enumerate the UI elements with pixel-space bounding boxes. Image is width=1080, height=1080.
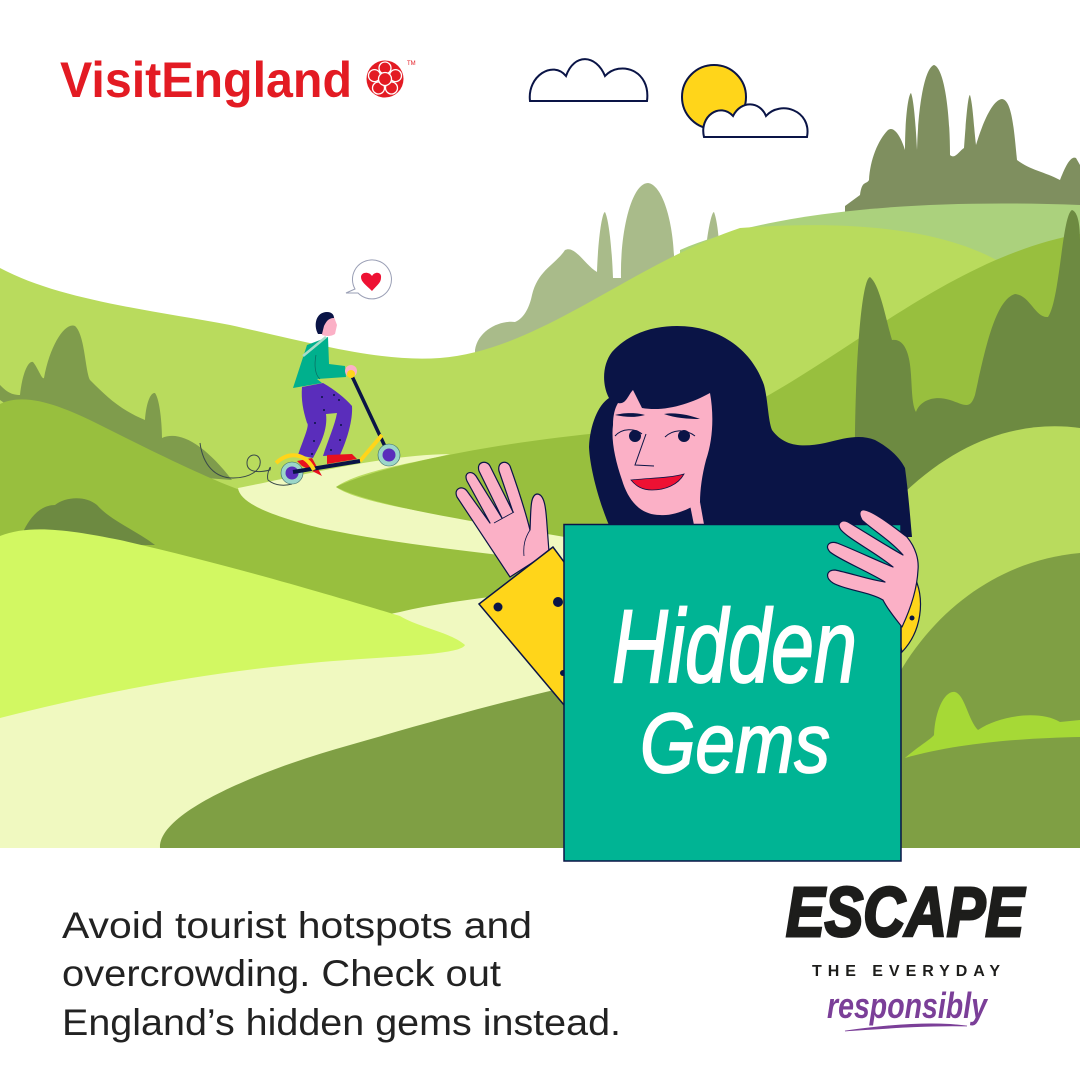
Hidden: Hidden	[612, 589, 857, 705]
hill: tongue right of road	[336, 432, 610, 545]
icon: sun	[682, 65, 746, 129]
trees: top right grey-green	[845, 65, 1080, 240]
hill: dark foreground	[160, 684, 900, 848]
fender	[276, 455, 314, 470]
front wheel	[378, 444, 400, 466]
hill: lime foreground	[0, 529, 465, 718]
waving hand	[456, 462, 549, 577]
icon: cloud left	[530, 59, 647, 101]
trousers	[298, 383, 352, 458]
ESCAPE: ESCAPE	[786, 873, 1026, 951]
grip	[347, 370, 355, 378]
shoes	[297, 454, 357, 476]
scooter rider	[200, 260, 400, 485]
logo: VisitEngland	[60, 52, 416, 108]
road: lower section	[0, 586, 580, 848]
scooter stem	[351, 374, 389, 455]
hill: right mid green	[600, 234, 1080, 848]
line 3: England’s hidden gems instead.	[62, 1002, 621, 1043]
trees: right dark	[855, 210, 1080, 510]
logo wordmark: VisitEngland	[60, 52, 352, 108]
satchel strap	[303, 337, 326, 356]
trademark: TM	[407, 61, 416, 67]
trees: left bush	[0, 326, 232, 480]
campaign logo: Escape the everyday responsibly	[786, 873, 1026, 1031]
scooter frame	[360, 435, 382, 461]
icon: Tudor rose	[366, 60, 404, 98]
woman holding sign	[456, 326, 920, 861]
sign card	[564, 524, 901, 861]
THE EVERYDAY: THE EVERYDAY	[812, 963, 1000, 980]
hill: far back light	[680, 203, 1080, 300]
head	[322, 317, 337, 336]
hair	[589, 326, 912, 537]
sleeve left	[479, 547, 570, 705]
mouth	[631, 474, 684, 490]
responsibly: responsibly	[827, 985, 989, 1026]
nose	[635, 434, 654, 466]
trouser dots	[311, 394, 342, 455]
hair	[316, 312, 334, 334]
hill: lower right front	[890, 737, 1080, 848]
hill: left mid green	[0, 399, 580, 848]
body copy	[62, 905, 621, 1043]
hill: far right light	[880, 426, 1080, 848]
hill: main light green	[0, 225, 1080, 848]
jacket	[293, 337, 346, 388]
eyes	[629, 430, 690, 442]
icon: cloud right	[703, 104, 808, 137]
hill: far right dark	[890, 553, 1080, 848]
underline stroke	[845, 1024, 967, 1031]
speech bubble with heart	[346, 260, 391, 299]
trees: middle distance	[475, 183, 720, 360]
sleeve right dot	[910, 616, 914, 620]
eye lines	[615, 430, 695, 437]
Gems: Gems	[640, 696, 830, 790]
face	[612, 390, 712, 515]
rear wheel	[281, 462, 303, 484]
road: upper bend	[238, 454, 580, 565]
bush: bright green lower right	[905, 692, 1080, 770]
eyebrows	[615, 413, 700, 419]
jacket arm line	[315, 355, 320, 379]
sign title	[612, 589, 857, 790]
bush: small dark left	[24, 498, 155, 545]
line 1: Avoid tourist hotspots and	[62, 905, 532, 946]
line 2: overcrowding. Check out	[62, 953, 502, 994]
sleeve dots	[494, 597, 566, 676]
scooter deck	[293, 461, 360, 472]
trail squiggle	[200, 443, 292, 485]
sleeve right	[895, 583, 920, 652]
neck	[690, 502, 705, 530]
holding hand	[828, 510, 918, 627]
hand	[345, 365, 357, 377]
